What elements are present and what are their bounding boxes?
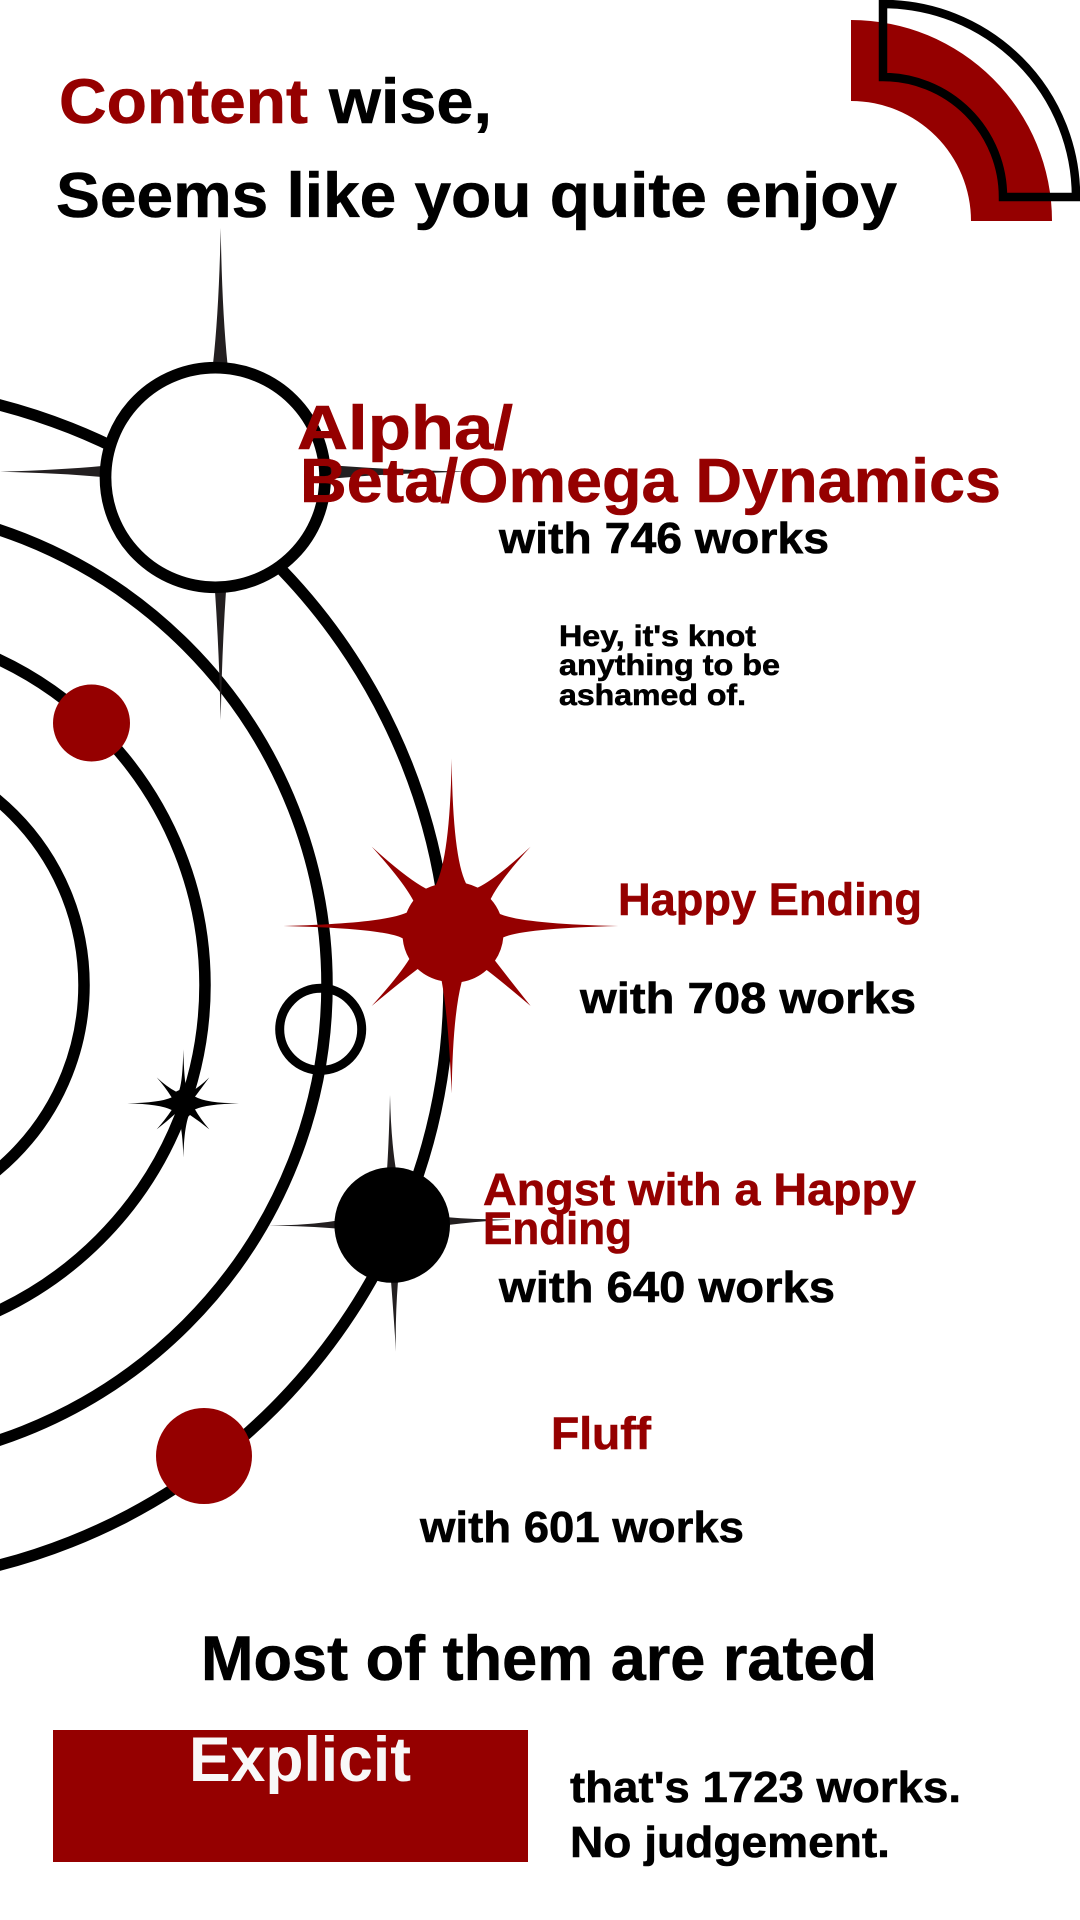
item 2: Happy Ending: with 708 works (579, 974, 916, 1023)
rating note: that's 1723 works. (570, 1763, 961, 1812)
explicit badge (53, 1725, 528, 1862)
planet: small black star (127, 1049, 239, 1157)
explicit badge: Explicit (189, 1725, 411, 1795)
item 4: Fluff: with 601 works (419, 1503, 744, 1552)
item 1: Alpha/Beta/Omega Dynamics (297, 394, 1001, 563)
item 3: Angst with a Happy Ending: Angst with a Happy (483, 1164, 916, 1215)
aside note: ashamed of. (559, 679, 746, 712)
item 1: Alpha/Beta/Omega Dynamics: Alpha/ (297, 394, 513, 463)
planet: white ringed star (0, 228, 470, 720)
rating note: No judgement. (570, 1818, 890, 1867)
title: wise, (328, 67, 492, 137)
decorative corner arcs (851, 4, 1076, 221)
aside note: Hey, it's knot (559, 620, 756, 653)
planet: red dot on third orbit (53, 684, 130, 762)
item 1: Alpha/Beta/Omega Dynamics: Beta/Omega Dynamics (300, 447, 1001, 516)
title: Content (59, 67, 308, 137)
item 4: Fluff: Fluff (551, 1408, 652, 1459)
item 2: Happy Ending: Happy Ending (618, 874, 922, 925)
item 3: Angst with a Happy Ending: with 640 works (498, 1263, 835, 1312)
aside note (559, 620, 780, 712)
item 1: Alpha/Beta/Omega Dynamics: with 746 works (498, 514, 829, 563)
rating heading: Most of them are rated (201, 1624, 877, 1694)
rating note (570, 1763, 961, 1867)
planet: small hollow ring (280, 988, 362, 1070)
aside note: anything to be (559, 649, 780, 682)
planet: large red dot (156, 1408, 252, 1504)
planet: red spiky star (283, 758, 618, 1093)
title: Seems like you quite enjoy (56, 161, 897, 231)
item 3: Angst with a Happy Ending (483, 1164, 916, 1312)
title (56, 67, 897, 231)
item 2: Happy Ending (579, 874, 922, 1023)
item 3: Angst with a Happy Ending: Ending (483, 1203, 632, 1254)
item 4: Fluff (419, 1408, 744, 1552)
concentric orbits (0, 386, 449, 1584)
planet: black star (268, 1095, 515, 1352)
